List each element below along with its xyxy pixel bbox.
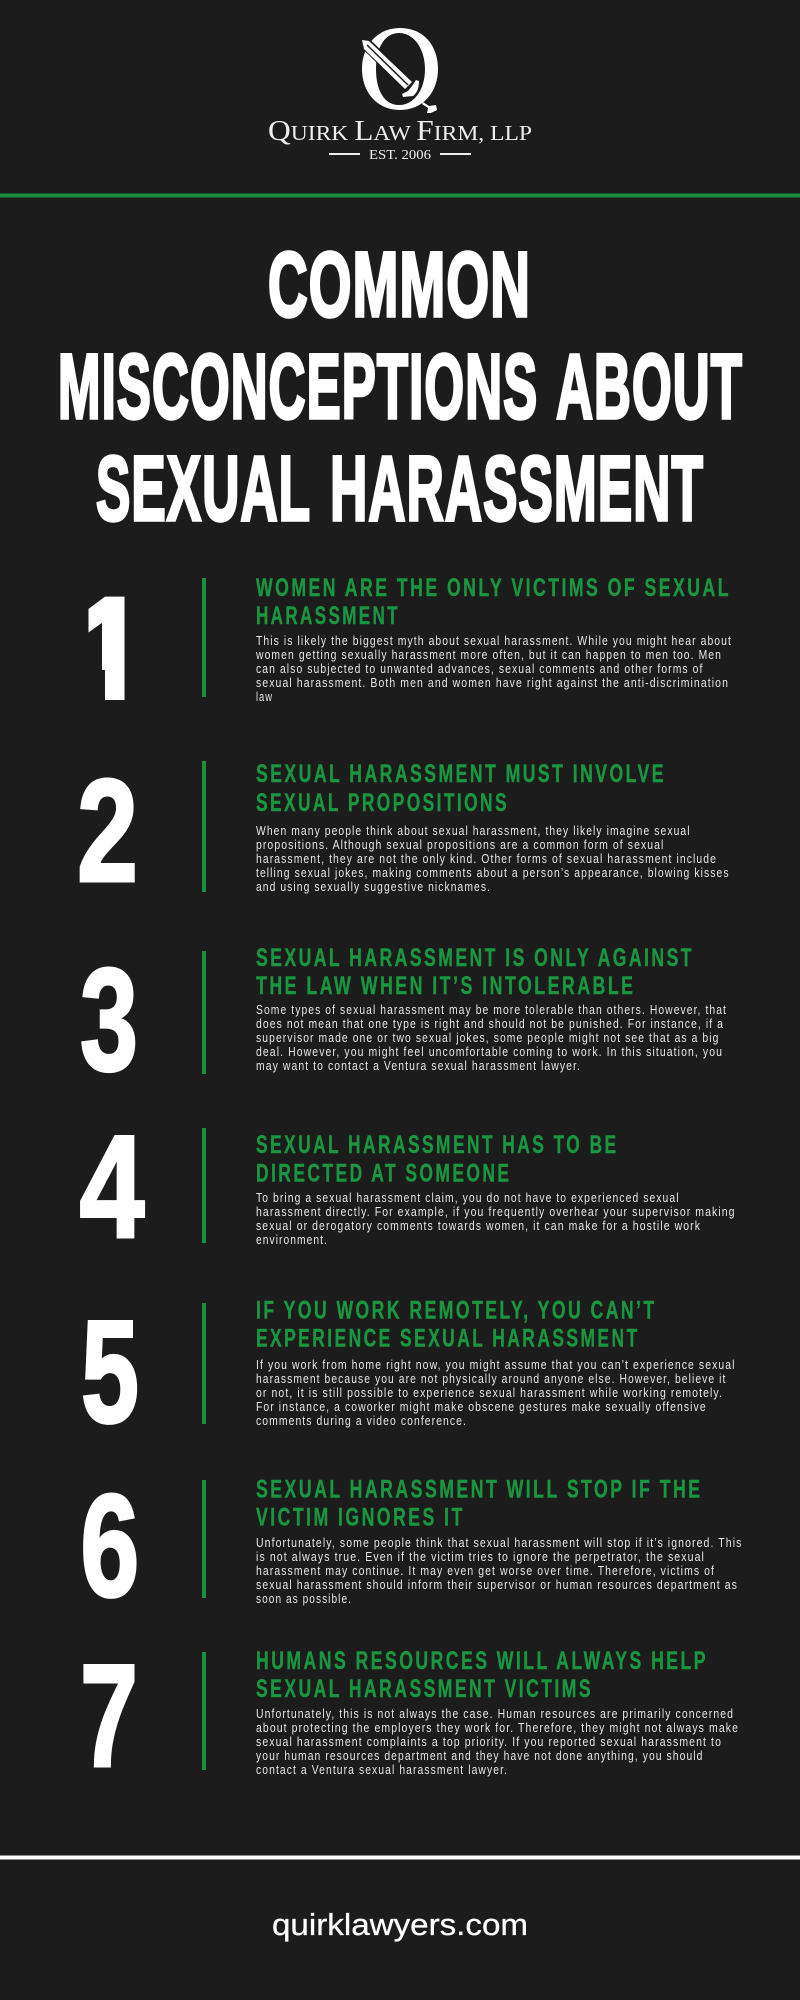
body 4: environment. bbox=[256, 1233, 328, 1247]
number 4: 4 bbox=[80, 1105, 144, 1268]
body 5 bbox=[256, 1358, 736, 1428]
body 3: supervisor made one or two sexual jokes, some people might not see that as a big bbox=[256, 1031, 720, 1045]
heading 3 bbox=[256, 944, 694, 1000]
heading 4: DIRECTED AT SOMEONE bbox=[256, 1160, 512, 1188]
body 4 bbox=[256, 1191, 736, 1247]
heading 7: SEXUAL HARASSMENT VICTIMS bbox=[256, 1675, 593, 1703]
body 2: propositions. Although sexual propositions are a common form of sexual bbox=[256, 838, 664, 852]
number 6: 6 bbox=[80, 1464, 139, 1627]
body 7: sexual harassment complaints a top priority. If you reported sexual harassment to bbox=[256, 1735, 722, 1749]
heading 3: THE LAW WHEN IT’S INTOLERABLE bbox=[256, 972, 636, 1000]
item 6 bbox=[80, 1464, 743, 1627]
established year: EST. 2006 bbox=[369, 148, 431, 163]
body 3: deal. However, you might feel uncomfortable coming to work. In this situation, you bbox=[256, 1045, 723, 1059]
body 6: soon as possible. bbox=[256, 1592, 352, 1606]
heading 2 bbox=[256, 760, 666, 817]
body 3 bbox=[256, 1003, 727, 1073]
heading 6 bbox=[256, 1476, 702, 1532]
body 1: law bbox=[256, 690, 273, 704]
body 2: and using sexually suggestive nicknames. bbox=[256, 880, 491, 894]
body 6: harassment may continue. It may even get worse over time. Therefore, victims of bbox=[256, 1564, 715, 1578]
logo: Quirk Law Firm bbox=[268, 28, 532, 163]
body 4: sexual or derogatory comments towards women, it can make for a hostile work bbox=[256, 1219, 701, 1233]
heading 7 bbox=[256, 1647, 708, 1703]
main heading bbox=[58, 234, 743, 540]
number 2: 2 bbox=[77, 749, 138, 912]
body 6: is not always true. Even if the victim tries to ignore the perpetrator, the sexual bbox=[256, 1550, 705, 1564]
body 7: your human resources department and they have not done anything, you should bbox=[256, 1749, 704, 1763]
heading 2: SEXUAL PROPOSITIONS bbox=[256, 789, 509, 817]
body 5: comments during a video conference. bbox=[256, 1414, 467, 1428]
body 3: may want to contact a Ventura sexual harassment lawyer. bbox=[256, 1059, 581, 1073]
body 6 bbox=[256, 1536, 742, 1606]
body 2: harassment, they are not the only kind. Other forms of sexual harassment include bbox=[256, 852, 717, 866]
body 1 bbox=[255, 634, 732, 704]
item 7 bbox=[80, 1634, 739, 1797]
item 5 bbox=[81, 1290, 736, 1453]
body 7 bbox=[256, 1707, 739, 1777]
number 3: 3 bbox=[80, 938, 138, 1101]
body 5: For instance, a coworker might make obscene gestures make sexually offensive bbox=[256, 1400, 707, 1414]
body 4: To bring a sexual harassment claim, you do not have to experienced sexual bbox=[256, 1191, 680, 1205]
heading 6: VICTIM IGNORES IT bbox=[256, 1504, 465, 1532]
number 1: 1 bbox=[76, 570, 144, 726]
item 2 bbox=[77, 749, 730, 912]
firm name: QUIRK LAW FIRM, LLP bbox=[268, 116, 532, 147]
body 2: When many people think about sexual harassment, they likely imagine sexual bbox=[256, 824, 691, 838]
number 7: 7 bbox=[80, 1634, 138, 1797]
main heading: COMMON bbox=[268, 234, 531, 336]
icon: Q with sword bbox=[358, 28, 438, 113]
item 3 bbox=[80, 938, 727, 1101]
heading 4 bbox=[256, 1131, 618, 1188]
footer website: quirklawyers.com bbox=[272, 1907, 528, 1942]
body 7: contact a Ventura sexual harassment lawyer. bbox=[256, 1763, 508, 1777]
item 1 bbox=[66, 570, 732, 726]
body 1: can also subjected to unwanted advances, sexual comments and other forms of bbox=[256, 662, 704, 676]
item 4 bbox=[80, 1105, 736, 1268]
heading 5 bbox=[256, 1296, 657, 1352]
number 5: 5 bbox=[81, 1290, 139, 1453]
heading 5: EXPERIENCE SEXUAL HARASSMENT bbox=[256, 1324, 640, 1352]
body 2 bbox=[256, 824, 730, 894]
heading 1: HARASSMENT bbox=[256, 602, 400, 630]
body 5: or not, it is still possible to experience sexual harassment while working remotely. bbox=[256, 1386, 723, 1400]
heading 4: SEXUAL HARASSMENT HAS TO BE bbox=[256, 1131, 618, 1159]
heading 1 bbox=[256, 574, 731, 630]
